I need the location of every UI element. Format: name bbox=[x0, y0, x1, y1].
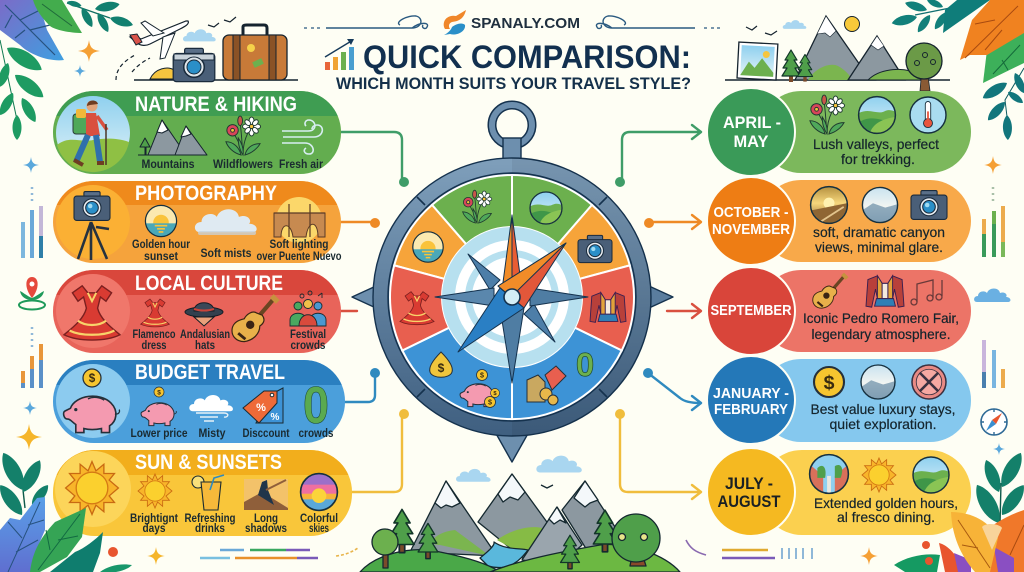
panel: sun and sunsets bbox=[53, 450, 352, 536]
compass segment icons: 0 bbox=[576, 346, 594, 383]
panel: April-May bbox=[707, 88, 971, 176]
icon: big sun bbox=[55, 451, 131, 527]
month: JULY - bbox=[725, 474, 773, 493]
description: views, minimal glare. bbox=[815, 239, 943, 255]
labels: drinks bbox=[195, 523, 225, 535]
labels bbox=[132, 239, 342, 263]
description: Best value luxury stays, bbox=[810, 401, 956, 417]
description: al fresco dining. bbox=[837, 509, 935, 525]
decoration: top-right foliage bbox=[891, 0, 1024, 140]
labels bbox=[130, 428, 334, 440]
labels: crowds bbox=[290, 340, 326, 352]
labels: Festival bbox=[290, 329, 326, 341]
month bbox=[718, 474, 781, 511]
description: Extended golden hours, bbox=[814, 495, 958, 511]
icon: long shadows bbox=[244, 479, 288, 510]
month: SEPTEMBER bbox=[710, 302, 792, 319]
panel: January-February bbox=[707, 356, 971, 444]
month: JANUARY - bbox=[713, 385, 789, 402]
connectors: right side bbox=[615, 125, 701, 499]
icons bbox=[813, 274, 942, 308]
compass segments bbox=[390, 175, 634, 419]
labels: over Puente Nuevo bbox=[256, 251, 342, 263]
panel: photography bbox=[53, 181, 342, 263]
panel: July-August bbox=[707, 448, 971, 536]
compass ring ticks bbox=[417, 197, 607, 397]
decoration: bottom-right foliage bbox=[894, 449, 1024, 572]
labels: Disccount bbox=[242, 428, 290, 440]
labels: Wildflowers bbox=[213, 159, 273, 171]
panel: October-November bbox=[707, 177, 971, 265]
icon: colorful skies bbox=[301, 474, 337, 510]
icon: large flamenco dress bbox=[56, 274, 130, 348]
subtitle: WHICH MONTH SUITS YOUR TRAVEL STYLE? bbox=[336, 75, 691, 93]
description bbox=[814, 495, 958, 525]
icon: piggy bank with coin bbox=[56, 364, 130, 438]
compass segment icons: $ bbox=[438, 361, 445, 375]
decoration: bottom-left foliage bbox=[0, 449, 132, 572]
description bbox=[810, 401, 956, 432]
heading: BUDGET TRAVEL bbox=[135, 361, 285, 384]
illustration: photo frame, mountains and tree bbox=[725, 16, 950, 91]
labels: hats bbox=[195, 340, 215, 352]
compass dial centre bbox=[442, 227, 582, 367]
description bbox=[803, 310, 959, 342]
labels: Misty bbox=[198, 428, 226, 440]
labels: Golden hour bbox=[132, 239, 190, 251]
panel: local culture bbox=[53, 270, 341, 353]
compass bbox=[352, 105, 673, 462]
month: AUGUST bbox=[718, 492, 781, 511]
labels: crowds bbox=[298, 428, 334, 440]
labels bbox=[130, 513, 338, 535]
icon: misty cloud bbox=[189, 395, 233, 421]
icon: zero crowds: 0 bbox=[303, 377, 329, 435]
month: APRIL - bbox=[723, 113, 781, 132]
icon: growth chart bbox=[325, 39, 354, 70]
icon: hiker bbox=[56, 96, 130, 172]
labels: days bbox=[142, 523, 166, 535]
connectors: left side bbox=[341, 132, 409, 492]
title: QUICK COMPARISON: bbox=[363, 39, 691, 75]
heading: SUN & SUNSETS bbox=[135, 451, 282, 474]
icon: location pin bbox=[19, 277, 45, 310]
month: FEBRUARY bbox=[714, 401, 788, 418]
icon: small piggy bank bbox=[141, 387, 176, 426]
brand name: SPANALY.COM bbox=[471, 15, 580, 32]
icons bbox=[811, 187, 947, 223]
description: for trekking. bbox=[841, 151, 915, 167]
month bbox=[723, 113, 781, 151]
description: soft, dramatic canyon bbox=[813, 224, 945, 240]
icon: small compass bbox=[981, 409, 1007, 435]
labels: Refreshing bbox=[184, 513, 236, 525]
icon: small flamenco dress bbox=[141, 299, 169, 327]
description bbox=[813, 224, 945, 255]
description: Lush valleys, perfect bbox=[813, 136, 939, 152]
labels: Soft mists bbox=[200, 248, 252, 260]
ornament: header flourishes bbox=[304, 16, 720, 28]
icons bbox=[810, 455, 949, 493]
month: MAY bbox=[734, 132, 769, 151]
month: NOVEMBER bbox=[712, 221, 790, 238]
mountain landscape bbox=[360, 456, 680, 572]
panel: September bbox=[707, 267, 971, 355]
labels: Long bbox=[254, 513, 278, 525]
icon: soft mists bbox=[195, 209, 257, 235]
labels: Soft lighting bbox=[270, 239, 328, 251]
labels: Brightignt bbox=[130, 513, 178, 525]
icon: fresh air bbox=[282, 120, 322, 154]
description: legendary atmosphere. bbox=[812, 326, 950, 342]
heading: PHOTOGRAPHY bbox=[135, 182, 277, 205]
labels: Andalusian bbox=[180, 329, 230, 341]
labels: Lower price bbox=[130, 428, 188, 440]
icon: festival crowd bbox=[290, 291, 326, 326]
compass ring handle bbox=[492, 105, 532, 162]
month bbox=[712, 204, 790, 238]
labels: Mountains bbox=[142, 159, 194, 171]
icon: refreshing drink bbox=[192, 475, 224, 510]
description bbox=[813, 136, 939, 167]
icon: wildflowers bbox=[226, 116, 261, 155]
description: Iconic Pedro Romero Fair, bbox=[803, 310, 959, 326]
icon: guitar bbox=[232, 296, 278, 342]
icon: discount tag bbox=[243, 388, 283, 423]
icons bbox=[814, 365, 946, 399]
icon: mountains bbox=[138, 120, 207, 155]
illustration: plane, camera and suitcase bbox=[116, 17, 298, 82]
month: OCTOBER - bbox=[714, 204, 788, 221]
heading: LOCAL CULTURE bbox=[135, 272, 283, 295]
labels: Flamenco bbox=[132, 329, 176, 341]
icon: small sun bbox=[138, 474, 172, 508]
month bbox=[713, 385, 789, 418]
labels: sunset bbox=[144, 251, 178, 263]
labels: shadows bbox=[245, 523, 287, 535]
compass star bbox=[435, 215, 588, 383]
logo bbox=[444, 10, 466, 35]
labels: skies bbox=[309, 523, 329, 535]
icon: discount tag: % bbox=[271, 412, 280, 423]
icon: Puente Nuevo bridge bbox=[274, 197, 325, 243]
icon: discount tag: % bbox=[256, 402, 266, 414]
description: quiet exploration. bbox=[830, 416, 936, 432]
heading: NATURE & HIKING bbox=[135, 93, 297, 116]
compass body and points bbox=[352, 158, 673, 462]
icons bbox=[810, 95, 946, 134]
icon: camera on tripod bbox=[56, 185, 130, 260]
icon: golden sunset bbox=[145, 205, 177, 237]
panel: budget travel bbox=[53, 360, 345, 443]
labels bbox=[142, 159, 323, 171]
compass segment icons bbox=[400, 190, 626, 408]
panel: nature and hiking bbox=[53, 91, 341, 174]
decoration: top-left foliage bbox=[0, 0, 134, 140]
icon: Andalusian hat bbox=[185, 303, 223, 326]
labels: dress bbox=[142, 340, 166, 352]
labels: Colorful bbox=[300, 513, 338, 525]
labels: Fresh air bbox=[279, 159, 323, 171]
labels bbox=[132, 329, 326, 352]
